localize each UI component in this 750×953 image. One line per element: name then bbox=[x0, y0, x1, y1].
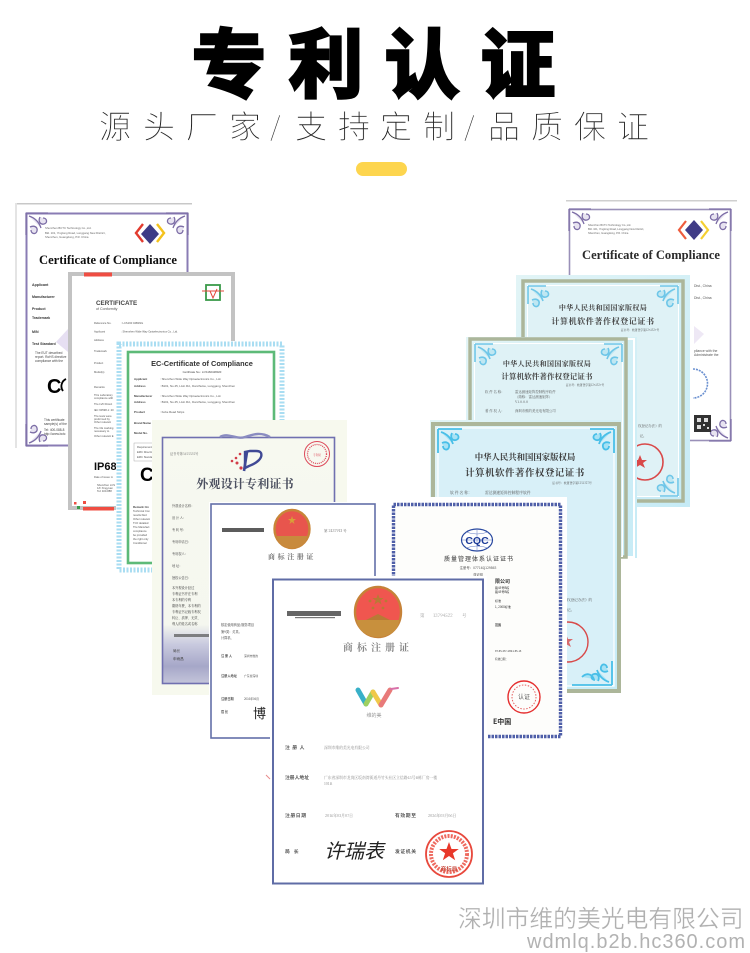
certificate: CE conformity, grey border: This Laboratory bbox=[94, 393, 113, 397]
certificate: software copyright, middle: 深圳市维的美光电有限公司 bbox=[515, 408, 556, 413]
certificate: design patent: 局长 bbox=[173, 648, 181, 654]
certificate: CE compliance, left back: This certificate bbox=[44, 418, 65, 422]
certificate: design patent bbox=[152, 420, 347, 695]
certificate: design patent: 设 计 人： bbox=[172, 515, 186, 520]
certificate: trademark registration, small: 第9类：灯具、 bbox=[221, 629, 242, 634]
certificate: trademark registration, front: 商标注册证 bbox=[343, 639, 413, 654]
icon: QR code bbox=[694, 415, 711, 432]
certificate: trademark registration, front: 深圳市维的美光电有限公司 bbox=[324, 745, 370, 751]
certificate: CE conformity, grey border: : LCS160 04B1NG bbox=[121, 321, 143, 325]
certificate: CE compliance, left back: compliance with the bbox=[35, 359, 63, 363]
certificate: CE conformity, grey border: Applicant bbox=[94, 330, 105, 334]
certificate: design patent: 授权公告日： bbox=[172, 575, 191, 580]
certificate: design patent: 专 利 号： bbox=[172, 527, 186, 532]
certificate: EC compliance, green border: : Shenzhen Wide Way Optoelectronics Co., Ltd. bbox=[160, 394, 221, 398]
certificate: trademark registration, front: 2016年03月07日 bbox=[325, 813, 353, 819]
certificate: CE compliance, left back: Manufacturer bbox=[32, 295, 55, 299]
seal bbox=[304, 442, 330, 466]
certificate: trademark registration, front: 维的美 bbox=[366, 712, 382, 719]
certificate: software copyright, middle: 著 作 权 人： bbox=[485, 408, 505, 413]
certificate: EC compliance, green border: results filed bbox=[133, 513, 147, 517]
certificate: CE compliance, left back: http://www.bctc bbox=[44, 432, 66, 436]
certificate: EC compliance, green border: The Manufact bbox=[133, 525, 150, 529]
certificate: CE compliance, right back: Administrate the bbox=[694, 353, 719, 357]
certificate: trademark registration, front: 局长 bbox=[285, 848, 303, 855]
subtitle bbox=[99, 102, 649, 148]
certificate: software copyright, front: 中华人民共和国国家版权局 bbox=[475, 451, 575, 463]
certificate: CE conformity, grey border: The tests were bbox=[94, 414, 112, 418]
certificate: design patent: 外观设计专利证书 bbox=[196, 475, 295, 492]
certificate: trademark registration, front: 号 bbox=[462, 612, 467, 619]
icon: national emblem bbox=[355, 587, 401, 637]
certificate: software copyright, front: 证书号：软著登字第1251327号 bbox=[552, 480, 592, 485]
subtitle: 源头厂家 bbox=[99, 102, 261, 148]
certificate: software copyright, middle: 中华人民共和国国家版权局 bbox=[503, 359, 591, 369]
certificate: design patent: 地 址： bbox=[172, 563, 182, 568]
certificate: EC compliance, green border: C bbox=[140, 465, 154, 486]
certificate: CE conformity, grey border: Model(s) bbox=[94, 370, 105, 374]
certificate: design patent: 缴纳年费，本专利的 bbox=[172, 603, 201, 608]
certificate: CE compliance, right back: Dist., China bbox=[694, 296, 712, 300]
seal bbox=[548, 622, 588, 662]
certificate: CE compliance, left back: Tel: 400-088-8 bbox=[44, 428, 65, 432]
certificate: design patent: 本外观设计经过 bbox=[172, 585, 195, 590]
certificate: EC compliance, green border: Conditional bbox=[133, 541, 147, 545]
certificate: trademark registration, front: 101B bbox=[324, 782, 333, 787]
certificate: CE compliance, left back: Test Standard bbox=[32, 342, 56, 346]
certificate: design patent: 专利证书并在专利 bbox=[172, 591, 198, 596]
certificate: CE compliance, left back: Certificate of Compliance bbox=[39, 252, 177, 267]
certificate: CE conformity, grey border: Trademark bbox=[94, 349, 108, 353]
certificate: software copyright, middle bbox=[466, 337, 637, 558]
certificate: design patent: 专利证书记载专利权 bbox=[172, 609, 201, 614]
certificate: EC compliance, green border: TCF detailed bbox=[133, 521, 149, 525]
certificate: design patent: 利人的姓名或名称 bbox=[172, 621, 198, 626]
certificate: EC compliance, green border: EMC Directive bbox=[137, 450, 155, 454]
certificate: CE conformity, grey border bbox=[68, 272, 235, 510]
certificate: CQC quality management: 1, 2008标准 bbox=[495, 604, 511, 609]
certificate: trademark registration, small: 深圳市维的 bbox=[244, 654, 258, 658]
icon: diamond logo bbox=[136, 224, 164, 244]
certificate: design patent: 证书号第3455535号 bbox=[170, 451, 199, 456]
yellow accent pill bbox=[356, 162, 407, 176]
certificate: CE compliance, right back: Bld. 101, Yinglong Road, Longgang New District, bbox=[588, 227, 644, 231]
certificate: software copyright, back: 记。 bbox=[640, 433, 646, 438]
certificate: EC compliance, green border: the right only bbox=[133, 537, 149, 541]
certificate: CE conformity, grey border: Address bbox=[94, 338, 105, 342]
certificate: software copyright, middle: （简称：雷达测速矩阵） bbox=[515, 394, 552, 399]
certificate: CE conformity, grey border: The CE marking bbox=[94, 426, 114, 430]
certificate: EC compliance, green border: Remark: Ev bbox=[133, 505, 149, 509]
certificate: design patent: 专利权人： bbox=[172, 551, 188, 556]
certificate: software copyright, back: 计算机软件著作权登记证书 bbox=[551, 316, 655, 327]
icon: diamond logo bbox=[679, 220, 708, 240]
icon: national emblem bbox=[274, 510, 310, 548]
certificate: software copyright, front bbox=[430, 420, 621, 693]
certificate: software copyright, front: 软 件 名 称： bbox=[450, 490, 472, 496]
certificate: trademark registration, front: 注册日期 bbox=[285, 812, 307, 819]
certificate: CQC quality management: 有效日期： bbox=[495, 657, 508, 661]
certificate: software copyright, back: 证书号：软著登字第1251327号 bbox=[621, 328, 659, 332]
certificate: software copyright, front: 计算机软件著作权登记证书 bbox=[465, 465, 585, 479]
certificate: trademark registration, front: 发证机关 bbox=[395, 848, 417, 855]
certificate: CE conformity, grey border: Shenzhen LCS bbox=[97, 483, 115, 487]
certificate: CE conformity, grey border: Other relevant E bbox=[94, 434, 114, 438]
certificate: trademark registration, small: 计算机、 bbox=[221, 635, 234, 640]
certificate: CE compliance, left back: Product bbox=[32, 307, 46, 311]
icon: W rainbow logo bbox=[358, 688, 398, 705]
certificate: CE conformity, grey border: Product bbox=[94, 361, 104, 365]
certificate: EC compliance, green border: Product bbox=[134, 410, 145, 414]
certificate: CQC quality management: 07-05-25～2021-05-15 bbox=[495, 649, 522, 653]
certificate: CQC quality management: 注册号：07716Q129865 bbox=[460, 565, 497, 570]
certificate: CE conformity, grey border: Date of issue: A bbox=[94, 475, 113, 479]
certificate: trademark registration, front: 13794522 bbox=[433, 613, 453, 619]
certificate: EC compliance, green border: : Shenzhen Wide Way Optoelectronics Co., Ltd. bbox=[160, 377, 221, 381]
certificate: trademark registration, front: 注册人 bbox=[285, 744, 307, 751]
certificate: software copyright, front: 权登记办法》的 bbox=[567, 597, 593, 603]
certificate: CE compliance, right back bbox=[562, 200, 738, 446]
certificate: CE compliance, right back: Dist., China bbox=[694, 284, 712, 288]
certificate: trademark registration, small: 注册日期 bbox=[221, 696, 234, 701]
seal: 专利局 bbox=[313, 453, 321, 457]
certificate: trademark registration, small: 广东省深圳 bbox=[244, 674, 258, 678]
certificate: CQC quality management: 限公司 bbox=[495, 578, 510, 585]
certificate: trademark registration, front: 第 bbox=[420, 612, 425, 619]
certificate: CE conformity, grey border: compliance with bbox=[94, 396, 114, 400]
footer website watermark: wdmlq.b2b.hc360.com bbox=[526, 931, 745, 953]
certificate: EC compliance, green border: Address bbox=[134, 400, 146, 404]
certificate: design patent: 转让、质押、无效、 bbox=[172, 615, 201, 620]
certificate: CE compliance, left back: Applicant bbox=[32, 283, 49, 287]
certificate: EC compliance, green border: compliance bbox=[133, 529, 147, 533]
certificate: EC compliance, green border: : B101, No.45, Lixin Rd., Danzhulou, Longgang, Shenzhen bbox=[160, 384, 235, 388]
certificate: software copyright, middle: 软 件 名 称： bbox=[485, 389, 505, 394]
certificate: software copyright, middle: 雷达测速矩阵控制程序软件 bbox=[515, 389, 556, 394]
certificate: CE conformity, grey border: of Conformity bbox=[96, 307, 118, 311]
certificate: CE compliance, left back: sample(s) of the bbox=[44, 422, 67, 426]
seal: trademark office: 商标局 bbox=[441, 865, 458, 873]
certificate: trademark registration, front bbox=[266, 576, 487, 887]
footer company name: 深圳市维的美光电有限公司 bbox=[458, 899, 744, 934]
certificate: design patent: 申雨昌 bbox=[173, 656, 184, 662]
subtitle: 支持定制 bbox=[295, 102, 455, 148]
certificate: EC compliance, green border: be provided bbox=[133, 533, 148, 537]
certificate: CE compliance, right back: Shenzhen BCTC Technology Co.,Ltd. bbox=[588, 223, 631, 227]
certificate: CE compliance, left back: C bbox=[47, 376, 61, 398]
seal: 认证 bbox=[518, 692, 530, 701]
certificate: design patent: 专利申请日： bbox=[172, 539, 191, 544]
certificate: EC compliance, green border: Model No. bbox=[134, 431, 148, 435]
certificate: CE conformity, grey border: preformed by bbox=[94, 417, 110, 421]
certificate: EC compliance, green border bbox=[116, 341, 285, 573]
certificate: CE conformity, grey border: : Shenzhen Wide Way Optoelectronics Co., Ltd. bbox=[121, 330, 178, 334]
certificate: CQC quality management: 标准 bbox=[495, 598, 501, 603]
certificate: CE compliance, right back: Shenzhen, Guangdong, P.R. China bbox=[588, 231, 629, 235]
certificate: CQC quality management: E中国 bbox=[493, 717, 511, 727]
certificate: CE compliance, left back: Shenzhen BCTC Technology Co.,Ltd. bbox=[45, 226, 92, 230]
certificate: CQC quality management: 范围 bbox=[495, 622, 501, 627]
certificate: CQC quality management: 路45号B栋 bbox=[495, 589, 509, 594]
certificate: CE compliance, left back: Bld. 101, Yinglong Road, Longgang New District, bbox=[45, 231, 106, 235]
certificate: CE conformity, grey border: Tel: 400-888 bbox=[97, 489, 112, 493]
certificate: EC compliance, green border: Brand Name bbox=[134, 421, 151, 425]
certificate: trademark registration, front: 注册人地址 bbox=[285, 774, 309, 781]
certificate: trademark registration, small: 商标注册证 bbox=[268, 552, 316, 562]
certificate: trademark registration, front: 2026年03月06日 bbox=[428, 813, 457, 819]
certificate: software copyright, back: 权登记办法》的 bbox=[638, 423, 662, 428]
certificate: trademark registration, small: 注 册 人 bbox=[221, 653, 233, 658]
certificate: CE compliance, right back: pliance with the bbox=[694, 349, 717, 353]
icon: CQC logo bbox=[462, 529, 492, 551]
certificate: CE conformity, grey border: Other relevant bbox=[94, 420, 111, 424]
seal bbox=[627, 444, 663, 480]
certificate: EC compliance, green border: : Kobe Read Strips bbox=[160, 410, 185, 414]
seal bbox=[508, 681, 540, 713]
certificate: EC compliance, green border: Manufacturer bbox=[134, 394, 153, 398]
certificate: EC compliance, green border: : B101, No.45, Lixin Rd., Danzhulou, Longgang, Shenzhen bbox=[160, 400, 235, 404]
certificate: trademark registration, small: 第 2437913 号 bbox=[324, 528, 347, 534]
certificate: EC compliance, green border: Address bbox=[134, 384, 146, 388]
certificate: EC compliance, green border: Other relevant bbox=[133, 517, 150, 521]
seal: trademark office bbox=[426, 831, 472, 877]
certificate: CE compliance, left back: report. RoHS directive bbox=[35, 355, 67, 359]
certificate: CE conformity, grey border: The LVD Direct bbox=[94, 402, 112, 406]
certificate: trademark registration, front: 广东省深圳市龙岗区坂南湾街道丹竹头社区立信路45号B栋厂房一楼 bbox=[324, 775, 437, 781]
certificate: software copyright, middle: V1.0.0.0 bbox=[515, 399, 528, 404]
certificate: EC compliance, green border: Applicant bbox=[134, 377, 147, 381]
certificate: CQC quality management: 兹证明 bbox=[473, 572, 483, 577]
certificate: trademark registration, small: 博 bbox=[253, 703, 266, 722]
certificate: trademark registration, small bbox=[209, 502, 377, 740]
certificate: CE conformity, grey border: necessary to bbox=[94, 429, 110, 433]
certificate: CE compliance, left back: The EUT described bbox=[35, 351, 63, 355]
certificate: trademark registration, small: 局 长 bbox=[221, 709, 229, 714]
icon: CQC logo: CQC bbox=[465, 535, 489, 547]
certificate: CQC quality management: 质量管理体系认证证书 bbox=[444, 554, 514, 563]
subtitle: 品质保证 bbox=[488, 102, 649, 148]
certificate: CE conformity, grey border: CERTIFICATE bbox=[96, 300, 137, 307]
icon: patent logo bbox=[231, 451, 261, 471]
certificate: EC compliance, green border: Requirement bbox=[137, 445, 153, 449]
icon: green logo bbox=[202, 285, 224, 300]
certificate: CQC quality management: 路45号B栋 bbox=[495, 585, 509, 590]
certificate: CE conformity, grey border: 1/F Xingyuan bbox=[97, 486, 113, 490]
certificate: CE compliance, left back bbox=[15, 203, 192, 448]
certificate: CE conformity, grey border: IEC 60598-1: 20 bbox=[94, 408, 114, 412]
certificate: EC compliance, green border: EC-Certificate of Compliance bbox=[151, 359, 253, 368]
certificate: software copyright, front: 记。 bbox=[567, 607, 574, 613]
certificate: CQC quality management bbox=[386, 497, 567, 747]
certificate: trademark registration, small: 2016年04月 bbox=[244, 697, 259, 701]
certificate: CE conformity, grey border: Reference No. bbox=[94, 321, 112, 325]
certificate: EC compliance, green border: Certificate No.: LCS160428020 bbox=[183, 370, 222, 374]
certificate: CE conformity, grey border: IP68 bbox=[94, 461, 117, 473]
certificate: software copyright, back: 中华人民共和国国家版权局 bbox=[559, 303, 647, 313]
certificate: CE compliance, left back: Shenzhen, Guangdong, P.R. China bbox=[45, 235, 89, 239]
certificate: trademark registration, front: 有效期至 bbox=[395, 812, 417, 819]
certificate: trademark registration, small: 注册人地址 bbox=[221, 673, 238, 678]
certificate: software copyright, middle: 证书号：软著登字第1251327号 bbox=[566, 383, 604, 387]
certificate: CE compliance, right back: Certificate of Compliance bbox=[582, 248, 720, 262]
certificate: CE conformity, grey border: Remarks bbox=[94, 385, 105, 389]
subtitle: / bbox=[270, 105, 281, 144]
certificate: trademark registration, small: 核定使用商品/服务项目 bbox=[221, 622, 254, 627]
signature: 许瑞表 bbox=[324, 835, 386, 864]
certificate: EC compliance, green border: Technical Con bbox=[133, 509, 150, 513]
title: 专利认证 bbox=[192, 6, 555, 113]
certificate: EC compliance, green border: EMC Standard bbox=[137, 455, 155, 459]
certificate: CE compliance, left back: Trademark bbox=[32, 316, 50, 320]
certificate: software copyright, back bbox=[516, 275, 690, 507]
certificate: design patent: 本专利的专利 bbox=[172, 597, 192, 602]
certificate: software copyright, middle: 计算机软件著作权登记证书 bbox=[501, 371, 593, 382]
subtitle: / bbox=[464, 105, 475, 144]
certificate: CE compliance, left back: M/N bbox=[32, 330, 39, 334]
certificate: design patent: 外观设计名称： bbox=[172, 503, 194, 508]
certificate: software copyright, front: 雷达测速矩阵控制程序软件 bbox=[485, 490, 531, 496]
